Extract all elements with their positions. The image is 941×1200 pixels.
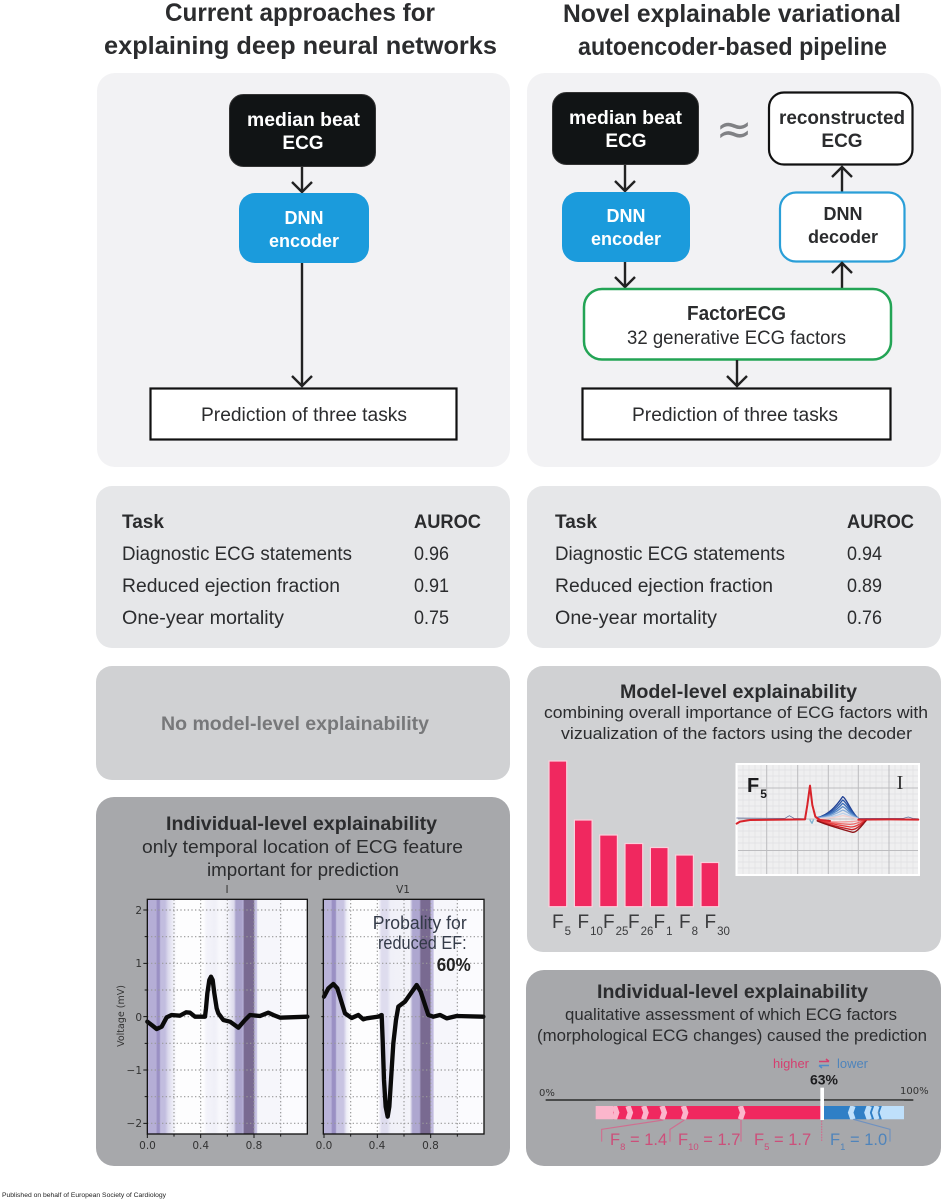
- plot: lead I: 1: [135, 958, 142, 970]
- panel: AUROC table novel pipeline: Diagnostic ECG statements: [555, 544, 785, 565]
- bar chart: factor importance: F: [552, 912, 564, 933]
- box: DNN encoder: [562, 192, 690, 262]
- force plot: factor contributions: = 1.0: [845, 1131, 887, 1149]
- panel: no model-level explainability: [96, 666, 510, 780]
- arrow: encoder to prediction: [292, 263, 312, 386]
- chart: ECG factor F5 decoder visualization: 5: [760, 787, 767, 801]
- callout: probability for reduced EF: reduced EF:: [378, 933, 467, 953]
- bar chart: factor importance: F: [603, 912, 615, 933]
- panel: AUROC table novel pipeline: Reduced ejection fraction: [555, 576, 773, 597]
- heading: model-level explainability: vizualization of the factors using the decoder: [561, 724, 912, 743]
- box: DNN decoder: decoder: [808, 227, 878, 247]
- box: prediction of three tasks: Prediction of three tasks: [201, 405, 407, 426]
- plot: lead I: I: [225, 884, 229, 896]
- force plot: factor contributions: = 1.7: [699, 1131, 740, 1149]
- heading: individual-level explainability: Individual-level explainability: [597, 982, 868, 1003]
- value: 63 percent: 63%: [810, 1072, 839, 1088]
- panel: current approach pipeline: [97, 73, 510, 467]
- plot: lead I: 0.4: [192, 1140, 209, 1152]
- plot: lead I: −2: [127, 1118, 142, 1130]
- right column title: autoencoder-based pipeline: [578, 33, 887, 61]
- callout: probability for reduced EF: [373, 913, 471, 975]
- force plot: factor contributions: F: [830, 1131, 840, 1149]
- panel: AUROC table novel pipeline: 0.76: [847, 608, 882, 629]
- panel: AUROC table current approach: AUROC: [414, 512, 481, 533]
- plot: lead V1: 0.8: [422, 1140, 439, 1152]
- force plot: factor contributions: = 1.4: [625, 1131, 667, 1149]
- box: DNN decoder: DNN: [824, 204, 862, 224]
- box: DNN encoder: DNN: [284, 208, 324, 228]
- panel: model-level explainability: [527, 666, 941, 952]
- box: FactorECG: 32 generative ECG factors: [627, 328, 846, 349]
- box: DNN encoder: encoder: [591, 229, 661, 249]
- panel: AUROC table novel pipeline: 0.94: [847, 544, 882, 565]
- plot: lead V1: V1: [396, 884, 410, 896]
- force plot: factor contributions: 10: [688, 1142, 699, 1153]
- bar chart: factor importance: 26: [641, 926, 653, 938]
- chart: ECG factor F5 decoder visualization: I: [897, 772, 903, 794]
- panel: AUROC table novel pipeline: Task: [555, 512, 597, 533]
- arrow: decoder to reconstructed: [832, 167, 852, 192]
- chart: ECG factor F5 decoder visualization: [736, 763, 920, 876]
- box: DNN encoder: DNN: [606, 206, 646, 226]
- box: DNN encoder: [239, 193, 369, 263]
- force plot: factor contributions: 0%: [539, 1088, 555, 1099]
- right column title: Novel explainable variational: [563, 0, 901, 28]
- heading: model-level explainability: [544, 682, 928, 743]
- heading: individual-level explainability: [537, 982, 927, 1045]
- panel: AUROC table current approach: 0.96: [414, 544, 449, 565]
- plot: lead V1: 0.0: [316, 1140, 332, 1152]
- box: DNN encoder: encoder: [269, 231, 339, 251]
- force plot: factor contributions: = 1.7: [769, 1131, 811, 1149]
- panel: AUROC table current approach: [96, 486, 510, 648]
- panel: AUROC table current approach: Task: [122, 512, 164, 533]
- box: median beat ECG: ECG: [605, 131, 647, 152]
- plot: lead I: 2: [135, 905, 142, 917]
- force plot: factor contributions: F: [678, 1131, 688, 1149]
- bar chart: factor importance: 1: [666, 926, 673, 938]
- force plot: factor contributions: 8: [620, 1142, 625, 1153]
- box: reconstructed ECG: [769, 92, 912, 164]
- heading: individual-level explainability: (morphological ECG changes) caused the prediction: [537, 1026, 927, 1045]
- box: median beat ECG: [552, 92, 698, 164]
- bar chart: factor importance: 5: [565, 926, 571, 938]
- plot: lead I: Voltage (mV): [116, 985, 127, 1047]
- box: median beat ECG: ECG: [282, 133, 324, 154]
- heading: model-level explainability: combining overall importance of ECG factors with: [544, 703, 928, 722]
- force plot: factor contributions: 100%: [900, 1086, 929, 1097]
- force plot: factor contributions: [539, 1086, 929, 1153]
- bar chart: factor importance: 30: [717, 926, 730, 938]
- box: FactorECG: FactorECG: [687, 303, 786, 325]
- panel: AUROC table current approach: Reduced ejection fraction: [122, 576, 340, 597]
- heading: individual-level explainability: Individual-level explainability: [166, 814, 437, 835]
- plot: lead I: 0.8: [246, 1140, 262, 1152]
- panel: AUROC table novel pipeline: 0.89: [847, 576, 882, 597]
- chart: ECG factor F5 decoder visualization: F: [747, 775, 759, 797]
- bar chart: factor importance: [549, 761, 730, 938]
- box: reconstructed ECG: reconstructed: [779, 108, 905, 129]
- heading: individual-level explainability: only temporal location of ECG feature: [142, 837, 463, 857]
- panel: AUROC table current approach: One-year mortality: [122, 608, 285, 629]
- left column title: explaining deep neural networks: [104, 32, 497, 60]
- plot: lead I: 0.0: [139, 1140, 156, 1152]
- box: DNN decoder: [780, 192, 904, 262]
- box: median beat ECG: median beat: [569, 108, 683, 129]
- panel: AUROC table novel pipeline: AUROC: [847, 512, 914, 533]
- panel: AUROC table novel pipeline: [527, 486, 941, 648]
- plot: lead I: [116, 884, 307, 1152]
- panel: AUROC table current approach: 0.75: [414, 608, 449, 629]
- heading: model-level explainability: Model-level explainability: [620, 682, 857, 703]
- panel: AUROC table novel pipeline: One-year mortality: [555, 608, 718, 629]
- box: prediction of three tasks: Prediction of three tasks: [632, 405, 838, 426]
- arrow: encoder to FactorECG: [615, 262, 635, 287]
- bar chart: factor importance: F: [578, 912, 589, 933]
- panel: no model-level explainability: No model-level explainability: [161, 714, 429, 735]
- panel: AUROC table current approach: Diagnostic ECG statements: [122, 544, 352, 565]
- bar chart: factor importance: 25: [616, 926, 628, 938]
- panel: individual-level explainability current approach: [96, 797, 510, 1166]
- plot: lead V1: [316, 884, 484, 1152]
- force plot: factor contributions: 5: [764, 1142, 769, 1153]
- footer credit: Published on behalf of European Society of Cardiology: [2, 1192, 167, 1199]
- box: FactorECG: [584, 289, 891, 360]
- legend: higher and lower: higher: [773, 1056, 810, 1071]
- approximately equal sign: ≈: [716, 104, 752, 155]
- plot: lead V1: 0.4: [369, 1140, 386, 1152]
- callout: probability for reduced EF: 60%: [437, 955, 471, 975]
- bar chart: factor importance: 8: [692, 926, 698, 938]
- bar chart: factor importance: 10: [590, 926, 603, 938]
- heading: individual-level explainability: qualitative assessment of which ECG factors: [565, 1005, 897, 1024]
- arrow: ECG to encoder: [615, 165, 635, 191]
- force plot: factor contributions: F: [754, 1131, 764, 1149]
- panel: novel pipeline: [527, 73, 941, 467]
- left column title: [104, 0, 497, 60]
- box: median beat ECG: median beat: [247, 110, 361, 131]
- bar chart: factor importance: F: [654, 912, 665, 933]
- bar chart: factor importance: F: [704, 912, 716, 933]
- force plot: factor contributions: F: [610, 1131, 620, 1149]
- panel: AUROC table current approach: 0.91: [414, 576, 449, 597]
- force plot: factor contributions: 1: [840, 1142, 845, 1153]
- arrow: ECG to encoder: [292, 167, 312, 192]
- plot: lead I: 0: [135, 1012, 142, 1024]
- bar chart: factor importance: F: [679, 912, 691, 933]
- right column title: [563, 0, 901, 61]
- legend: higher and lower: [773, 1056, 869, 1071]
- panel: individual-level explainability novel pipeline: [526, 970, 941, 1166]
- bar chart: factor importance: F: [628, 912, 640, 933]
- chart: lead I and V1 saliency plots: [116, 884, 484, 1152]
- arrow: FactorECG to decoder: [832, 263, 852, 288]
- legend: higher and lower: lower: [837, 1056, 869, 1071]
- heading: individual-level explainability: [142, 814, 463, 880]
- box: prediction of three tasks: [582, 388, 890, 440]
- box: reconstructed ECG: ECG: [821, 131, 863, 152]
- box: median beat ECG: [230, 94, 376, 166]
- callout: probability for reduced EF: Probality for: [373, 913, 467, 933]
- heading: individual-level explainability: important for prediction: [207, 860, 399, 880]
- arrow: FactorECG to prediction: [727, 360, 747, 386]
- plot: lead I: −1: [127, 1065, 142, 1077]
- box: prediction of three tasks: [150, 388, 456, 440]
